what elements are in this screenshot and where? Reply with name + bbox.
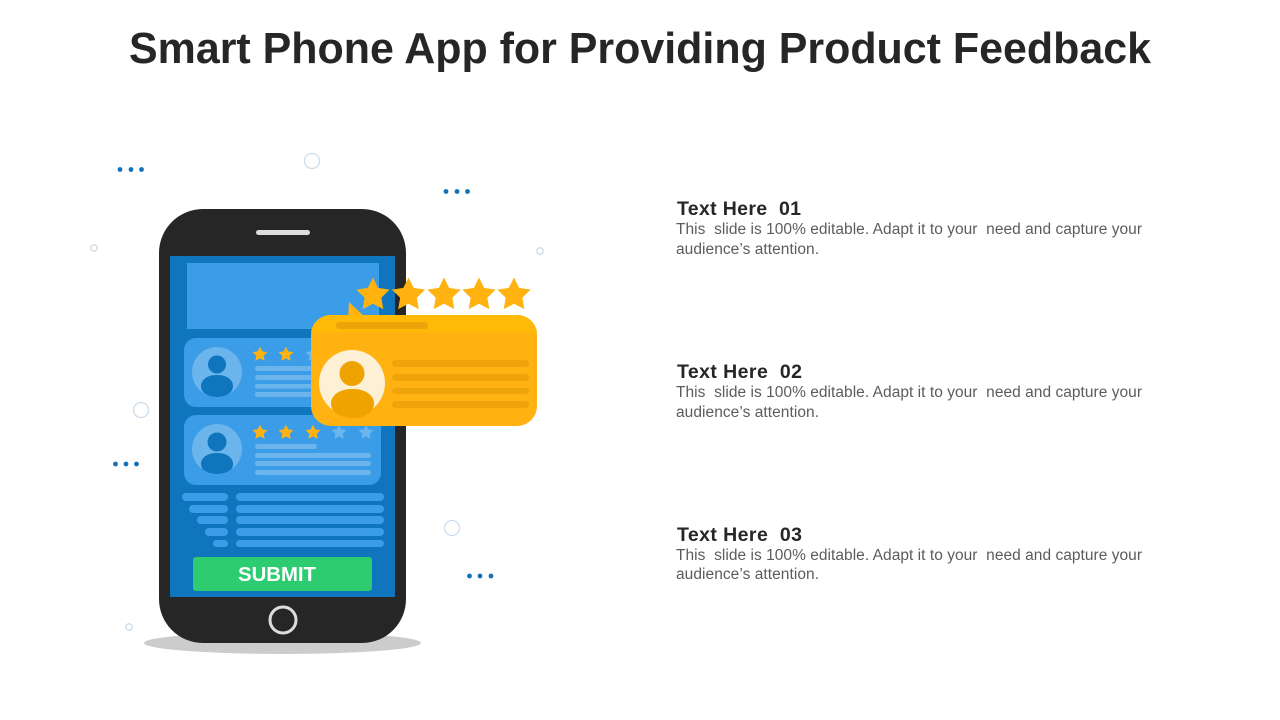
phone shadow xyxy=(144,632,421,654)
rating card xyxy=(311,278,537,426)
text block 02: This slide is 100% editable. Adapt it to your need and capture your xyxy=(676,384,1142,401)
text lines 1 xyxy=(255,366,371,397)
card body xyxy=(311,315,537,426)
smartphone xyxy=(159,209,406,643)
review card 1 xyxy=(184,338,311,407)
title: Smart Phone App for Providing Product Feedback xyxy=(129,24,1152,73)
screen xyxy=(170,256,395,597)
card text lines xyxy=(392,360,529,408)
stars 1 xyxy=(253,347,320,361)
home button xyxy=(270,607,296,633)
text lines 2 xyxy=(255,444,371,475)
text block 03: This slide is 100% editable. Adapt it to your need and capture your xyxy=(676,547,1142,564)
card avatar xyxy=(319,350,385,418)
phone body xyxy=(159,209,406,643)
text block 03 xyxy=(676,524,1142,583)
text block 02: audience’s attention. xyxy=(676,404,819,421)
text block 01 xyxy=(676,198,1142,258)
text block 03: Text Here 03 xyxy=(677,524,802,546)
card heading bar xyxy=(336,322,428,329)
card top band xyxy=(311,315,537,332)
text block 02 xyxy=(676,361,1142,421)
text block 01: This slide is 100% editable. Adapt it to your need and capture your xyxy=(676,221,1142,238)
submit button: SUBMIT xyxy=(238,564,316,586)
avatar 1 xyxy=(192,347,242,397)
five big stars xyxy=(356,278,531,309)
avatar 2 xyxy=(192,424,242,475)
submit button xyxy=(193,557,372,591)
text block 01: audience’s attention. xyxy=(676,241,819,258)
text block 03: audience’s attention. xyxy=(676,566,819,583)
speech tail xyxy=(348,302,366,320)
stars 2 xyxy=(253,425,373,439)
speaker xyxy=(256,230,310,235)
form rows xyxy=(182,493,384,547)
text block 01: Text Here 01 xyxy=(677,198,801,220)
top banner xyxy=(187,263,379,329)
decorative dots and rings xyxy=(91,154,543,630)
text block 02: Text Here 02 xyxy=(677,361,802,383)
review card 2 xyxy=(184,415,381,485)
